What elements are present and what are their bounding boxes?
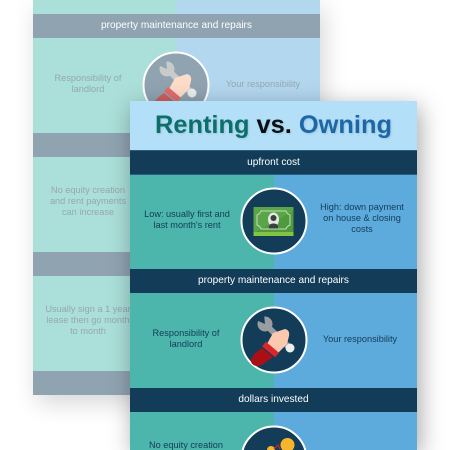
heading: upfront cost <box>130 150 417 175</box>
text: responsibility of landlord <box>153 328 220 349</box>
renting column 1 <box>130 175 274 269</box>
renting column 3 <box>130 412 274 450</box>
text: responsibility of landlord: Responsibility of <box>153 328 219 338</box>
panel: front sheet Renting vs. Owning <box>130 101 417 450</box>
faded text: no equity creation <box>50 185 126 217</box>
faded text: usually sign a 1 year lease: to month <box>70 326 106 336</box>
title: Renting vs. Owning <box>155 111 392 139</box>
faded text: no equity creation: and rent payments <box>50 196 126 206</box>
text: low upfront cost <box>144 209 230 230</box>
faded text: responsibility of landlord: landlord <box>72 84 104 94</box>
faded heading bar 3 <box>33 252 320 276</box>
text: high upfront cost <box>320 202 404 234</box>
faded heading: property maintenance and repairs: property maintenance and repairs <box>101 20 252 31</box>
faded text: your responsibility: Your responsibility <box>226 78 300 88</box>
owning column 1 <box>274 175 417 269</box>
owning column 2 <box>274 293 417 388</box>
faded text: responsibility of landlord: Responsibility of <box>55 73 121 83</box>
text: high upfront cost: costs <box>351 224 373 234</box>
text: no equity creation: No equity creation <box>149 440 223 450</box>
heading: upfront cost: upfront cost <box>247 157 300 168</box>
text: low upfront cost: Low: usually first and <box>144 209 230 219</box>
faded owning column <box>176 0 320 395</box>
faded renting column <box>33 0 176 395</box>
faded text: responsibility of landlord <box>55 73 122 94</box>
faded heading bar 4 <box>33 371 320 395</box>
text: high upfront cost: High: down payment <box>320 202 404 212</box>
faded heading: property maintenance and repairs <box>33 14 320 38</box>
heading: dollars invested <box>130 388 417 412</box>
text: your responsibility: Your responsibility <box>323 334 397 344</box>
faded heading bar 2 <box>33 133 320 157</box>
renting column 2 <box>130 293 274 388</box>
faded text: no equity creation: can increase <box>62 207 114 217</box>
faded text: usually sign a 1 year lease: Usually sign a 1 year <box>45 304 131 314</box>
faded icon: wrench in hand <box>142 52 210 101</box>
faded text: no equity creation: No equity creation <box>51 185 125 195</box>
text: responsibility of landlord: landlord <box>170 339 202 349</box>
icon: hand holding wrench <box>240 306 308 374</box>
icon: green banknote <box>240 188 308 254</box>
text: high upfront cost: on house & closing <box>323 212 401 222</box>
faded text: usually sign a 1 year lease: lease then go month <box>46 315 130 325</box>
heading: property maintenance and repairs <box>130 269 417 293</box>
heading: property maintenance and repairs: property maintenance and repairs <box>198 275 349 286</box>
faded text: usually sign a 1 year lease <box>45 304 131 336</box>
text: low upfront cost: last month's rent <box>153 220 221 230</box>
heading: dollars invested: dollars invested <box>238 394 309 405</box>
owning column 3 <box>274 412 417 450</box>
panel: faded back sheet <box>33 0 320 395</box>
icon: gold coins <box>242 426 306 450</box>
